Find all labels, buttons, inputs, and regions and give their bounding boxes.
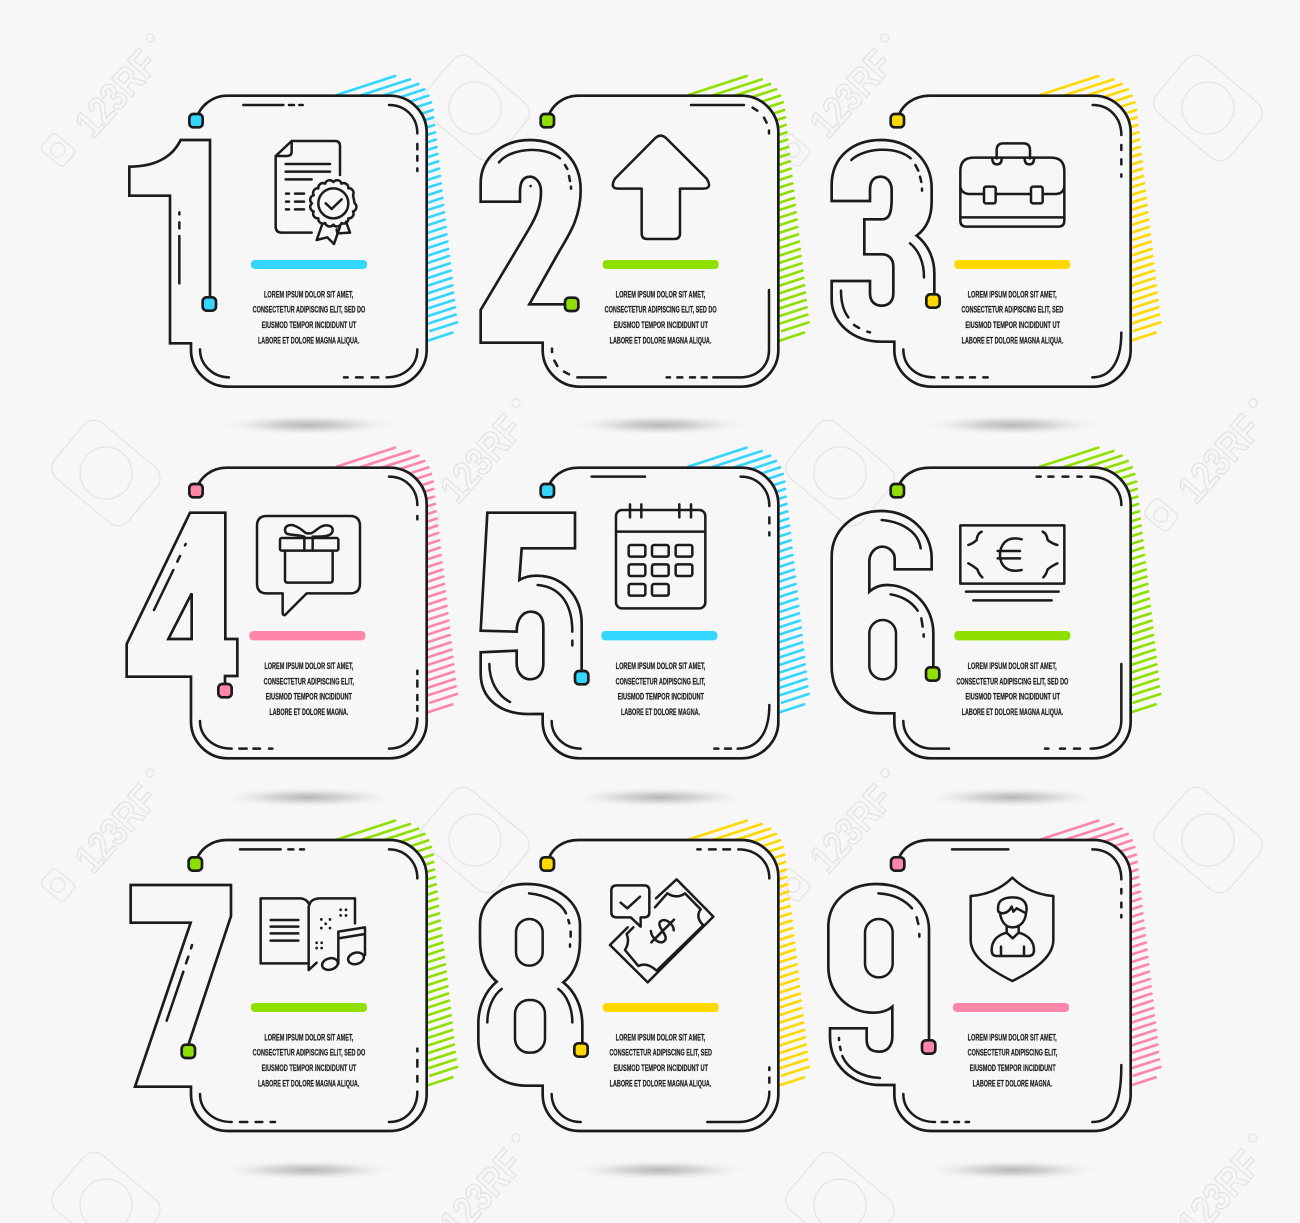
card fill: [191, 468, 427, 758]
inner dashes: [487, 849, 769, 1122]
text block: EIUSMOD TEMPOR INCIDIDUNT UT: [262, 320, 357, 330]
numeral 4 and frame: [127, 468, 427, 758]
card fill: [191, 840, 427, 1131]
stripes: [688, 448, 809, 713]
top node: [891, 114, 904, 127]
text block: LABORE ET DOLORE MAGNA ALIQUA.: [610, 1078, 711, 1088]
colour bar: [251, 1003, 367, 1012]
inner dashes: [839, 849, 1121, 1122]
icon: music book: [261, 898, 365, 972]
icon: euro banknote: [960, 525, 1064, 600]
text block: LOREM IPSUM DOLOR SIT AMET,: [616, 661, 705, 671]
shadow: [213, 1159, 403, 1181]
stripes: [1040, 821, 1160, 1086]
text block: LABORE ET DOLORE MAGNA ALIQUA.: [258, 1078, 359, 1088]
watermarks: 123RF: [67, 42, 167, 146]
numeral 8 lower counter: [515, 1000, 545, 1053]
shadow: [918, 414, 1108, 436]
top node: [891, 857, 904, 871]
numeral 2 and frame: [481, 96, 778, 387]
watermarks: 123RF: [802, 42, 902, 146]
top node: [189, 484, 203, 497]
inner dashes: [167, 849, 417, 1122]
text block: CONSECTETUR ADIPISCING ELIT, SED DO: [956, 676, 1068, 686]
numeral 9 and frame: [828, 840, 1131, 1131]
card fill: [543, 468, 778, 758]
end node: [565, 298, 578, 311]
watermarks: 123RF: [802, 777, 902, 881]
panel 7: music book: [131, 821, 457, 1181]
text block: EIUSMOD TEMPOR INCIDIDUNT: [618, 692, 704, 702]
inner dashes: [882, 477, 1121, 749]
text block: [253, 1032, 365, 1088]
shadow: [565, 787, 755, 808]
icon: certificate: [276, 141, 356, 244]
text block: [961, 289, 1064, 345]
text block: [616, 661, 705, 717]
colour bar: [603, 1003, 719, 1012]
stripes: [1040, 448, 1160, 713]
text block: LOREM IPSUM DOLOR SIT AMET,: [616, 1032, 705, 1042]
card fill: [543, 840, 778, 1131]
card fill: [894, 96, 1131, 387]
panel 3: briefcase: [832, 76, 1160, 436]
end node: [574, 1043, 588, 1057]
shadow: [213, 787, 403, 808]
icon: dollar payment: [610, 879, 713, 982]
colour bar: [601, 631, 717, 640]
top node: [189, 857, 202, 871]
top node: [541, 857, 554, 871]
text block: CONSECTETUR ADIPISCING ELIT, SED DO: [253, 305, 365, 315]
shadow: [565, 1159, 755, 1181]
numeral 6 and frame: [832, 468, 1131, 758]
text block: CONSECTETUR ADIPISCING ELIT,: [264, 676, 354, 686]
inner dashes: [179, 105, 417, 377]
numeral 3 and frame: [832, 96, 1131, 387]
stripes: [337, 448, 457, 713]
colour bar: [954, 631, 1070, 640]
end node: [926, 294, 940, 308]
numeral 9 counter: [865, 919, 893, 977]
card fill: [543, 96, 778, 387]
stripes: [337, 821, 457, 1086]
top node: [541, 114, 554, 127]
numeral 6 counter: [869, 620, 896, 679]
icon: up arrow: [613, 136, 709, 239]
stripes: [688, 821, 809, 1086]
text block: LOREM IPSUM DOLOR SIT AMET,: [264, 289, 353, 299]
colour bar: [603, 260, 719, 269]
numeral 8 upper counter: [516, 919, 543, 966]
shadow: [918, 1159, 1108, 1181]
watermarks: 123RF: [432, 407, 532, 511]
numeral 4 counter: [168, 593, 192, 639]
text block: [609, 1032, 712, 1088]
watermarks: 123RF: [1170, 407, 1270, 511]
panel 8: dollar payment: [478, 821, 809, 1181]
text block: LABORE ET DOLORE MAGNA.: [973, 1078, 1052, 1088]
card fill: [894, 840, 1131, 1131]
end node: [203, 297, 216, 311]
colour bar: [249, 631, 365, 640]
colour bar: [251, 260, 367, 269]
colour bar: [954, 260, 1070, 269]
text block: EIUSMOD TEMPOR INCIDIDUNT UT: [262, 1063, 357, 1073]
text block: LOREM IPSUM DOLOR SIT AMET,: [968, 661, 1057, 671]
panel 9: user shield: [828, 821, 1160, 1181]
end node: [182, 1045, 195, 1058]
inner dashes: [489, 477, 769, 749]
text block: LOREM IPSUM DOLOR SIT AMET,: [968, 289, 1057, 299]
end node: [926, 667, 939, 681]
text block: [605, 289, 717, 345]
text block: EIUSMOD TEMPOR INCIDIDUNT UT: [614, 320, 708, 330]
text block: EIUSMOD TEMPOR INCIDIDUNT: [266, 692, 352, 702]
text block: LOREM IPSUM DOLOR SIT AMET,: [264, 661, 353, 671]
text block: LABORE ET DOLORE MAGNA ALIQUA.: [962, 335, 1063, 345]
text block: EIUSMOD TEMPOR INCIDIDUNT: [970, 1063, 1056, 1073]
text block: LOREM IPSUM DOLOR SIT AMET,: [968, 1032, 1057, 1042]
panel 1: certificate: [129, 76, 457, 436]
text block: EIUSMOD TEMPOR INCIDIDUNT UT: [614, 1063, 708, 1073]
shadow: [565, 414, 755, 436]
inner dashes: [841, 105, 1121, 377]
text block: EIUSMOD TEMPOR INCIDIDUNT UT: [965, 692, 1060, 702]
text block: [968, 1032, 1057, 1088]
shadow: [213, 414, 403, 436]
panel 6: euro banknote: [832, 448, 1160, 808]
stripes: [337, 76, 457, 341]
end node: [218, 684, 232, 697]
numeral 7 and frame: [131, 840, 427, 1131]
shadow: [918, 787, 1108, 808]
panel 2: upload arrow: [481, 76, 809, 436]
icon: user shield: [971, 878, 1053, 981]
numeral 8 and frame: [478, 840, 778, 1131]
stripes: [688, 76, 809, 341]
text block: CONSECTETUR ADIPISCING ELIT, SED DO: [605, 305, 717, 315]
numeral 5 and frame: [481, 468, 778, 758]
text block: CONSECTETUR ADIPISCING ELIT, SED: [609, 1048, 712, 1058]
end node: [922, 1040, 935, 1054]
icon: calendar: [616, 504, 705, 608]
top node: [891, 484, 904, 497]
card fill: [191, 96, 427, 387]
text block: [253, 289, 365, 345]
text block: CONSECTETUR ADIPISCING ELIT, SED: [961, 305, 1064, 315]
stripes: [1040, 76, 1160, 341]
text block: [956, 661, 1068, 717]
icon: gift speech bubble: [257, 516, 360, 615]
text block: EIUSMOD TEMPOR INCIDIDUNT UT: [965, 320, 1060, 330]
text block: LOREM IPSUM DOLOR SIT AMET,: [616, 289, 705, 299]
text block: CONSECTETUR ADIPISCING ELIT,: [616, 676, 705, 686]
text block: [264, 661, 354, 717]
text block: LABORE ET DOLORE MAGNA.: [621, 707, 700, 717]
watermarks: 123RF: [67, 777, 167, 881]
text block: LABORE ET DOLORE MAGNA.: [269, 707, 348, 717]
colour bar: [953, 1003, 1069, 1012]
inner dashes: [499, 105, 769, 377]
panel 5: calendar: [481, 448, 809, 808]
inner dashes: [154, 477, 417, 749]
text block: LABORE ET DOLORE MAGNA ALIQUA.: [610, 335, 711, 345]
panel 4: gift message: [127, 448, 457, 808]
text block: CONSECTETUR ADIPISCING ELIT, SED DO: [253, 1048, 365, 1058]
text block: LABORE ET DOLORE MAGNA ALIQUA.: [962, 707, 1063, 717]
numeral 1 and frame: [129, 96, 427, 387]
text block: LABORE ET DOLORE MAGNA ALIQUA.: [258, 335, 359, 345]
icon: briefcase: [960, 143, 1064, 227]
end node: [575, 671, 588, 684]
top node: [189, 114, 203, 127]
card fill: [894, 468, 1131, 758]
text block: CONSECTETUR ADIPISCING ELIT,: [968, 1048, 1057, 1058]
text block: LOREM IPSUM DOLOR SIT AMET,: [264, 1032, 353, 1042]
top node: [541, 484, 554, 497]
